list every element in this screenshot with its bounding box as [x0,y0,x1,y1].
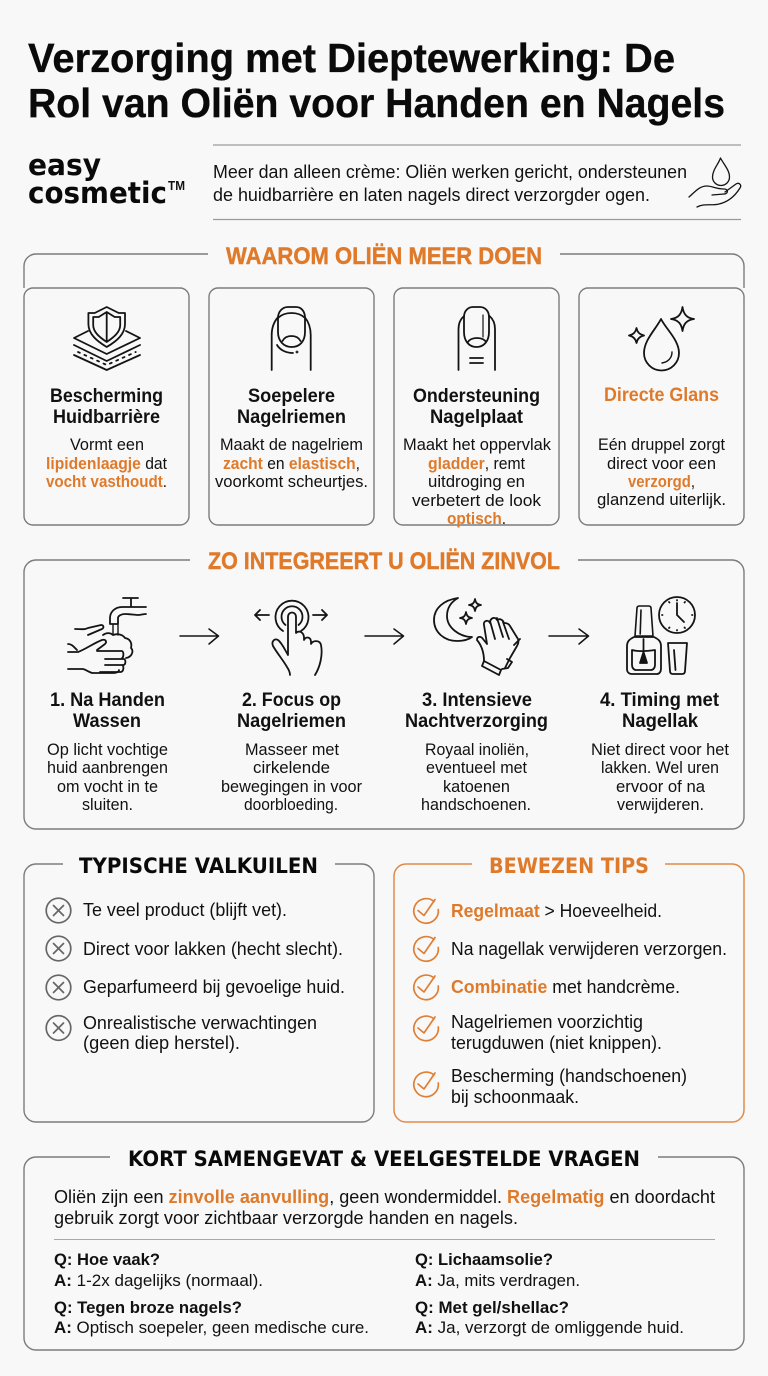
pitfall 4 [46,1013,317,1053]
step 2: focus op nagelriemen: cirkelende [253,759,330,777]
faq: lichaamsolie: Q: Lichaamsolie? [415,1251,553,1269]
heading: waarom: WAAROM OLIËN MEER DOEN [226,243,542,270]
step 3: intensieve nachtverzorging: 3. Intensieve [422,690,532,711]
step 1: na handen wassen [47,598,168,814]
step 1: na handen wassen: huid aanbrengen [47,759,168,777]
title: Rol van Oliën voor Handen en Nagels [28,80,725,126]
step 3: intensieve nachtverzorging: katoenen [443,778,510,796]
step 2: focus op nagelriemen: 2. Focus op [242,690,341,711]
tip 1 [414,899,662,923]
step 3: intensieve nachtverzorging: Royaal inoliën, [425,741,529,759]
arrow 1 [180,629,218,644]
card 3: ondersteuning nagelplaat: Ondersteuning [413,386,540,407]
summary text: Oliën zijn een zinvolle aanvulling, geen wondermiddel. Regelmatig en doordacht [54,1187,715,1207]
faq: lichaamsolie: A: Ja, mits verdragen. [415,1272,580,1290]
card 2: soepelere nagelriemen [209,288,374,525]
step 4: timing met nagellak: verwijderen. [617,796,704,814]
step 3: intensieve nachtverzorging: handschoenen. [421,796,531,814]
card 2: soepelere nagelriemen: Soepelere [248,386,335,407]
step 4: timing met nagellak [591,597,729,814]
panel: kort samengevat en veelgestelde vragen [24,1147,744,1350]
step 2: focus op nagelriemen: doorbloeding. [244,796,338,814]
arrow 3 [549,629,588,644]
card 4: directe glans [579,288,744,525]
heading: zo integreert: ZO INTEGREERT U OLIËN ZINVOL [208,548,560,575]
step 2: focus op nagelriemen: Nagelriemen [237,711,346,732]
panel: zo integreert u oliën zinvol [24,548,744,829]
faq: hoe vaak [54,1251,263,1290]
step 4: timing met nagellak: ervoor of na [616,778,706,796]
card 3: ondersteuning nagelplaat [394,288,559,528]
tip 3 [414,975,680,1000]
logo: easy cosmetic: cosmetic [28,176,167,210]
card 2: soepelere nagelriemen: voorkomt scheurtjes. [215,473,368,491]
step 1: na handen wassen: om vocht in te [57,778,158,796]
logo: easy cosmetic: easy [28,148,101,182]
step 2: focus op nagelriemen: Masseer met [245,741,339,759]
card 1: bescherming huidbarrière: vocht vasthoudt. [46,473,167,491]
card 1: bescherming huidbarrière: Bescherming [50,386,163,407]
summary text [54,1187,715,1228]
card 2: soepelere nagelriemen: zacht en elastisch, [223,455,360,473]
pitfall 1 [46,898,287,923]
tip 5: Bescherming (handschoenen) [451,1066,687,1086]
card 4: directe glans: Directe Glans [604,385,719,406]
step 3: intensieve nachtverzorging: eventueel met [426,759,527,777]
card 4: directe glans: verzorgd, [628,473,695,491]
title [28,35,725,126]
step 4: timing met nagellak: Nagellak [622,711,698,732]
faq: hoe vaak: Q: Hoe vaak? [54,1251,160,1269]
card 2: soepelere nagelriemen: Maakt de nagelriem [220,436,363,454]
card 1: bescherming huidbarrière: Huidbarrière [53,407,160,428]
pitfall 1: Te veel product (blijft vet). [83,900,287,920]
intro text [213,162,687,205]
tip 1: Regelmaat > Hoeveelheid. [451,901,662,921]
faq: tegen broze nagels: Q: Tegen broze nagels? [54,1299,242,1317]
intro text: de huidbarrière en laten nagels direct verzorgder ogen. [213,185,650,205]
faq: tegen broze nagels: A: Optisch soepeler, geen medische cure. [54,1319,369,1337]
faq: tegen broze nagels [54,1299,369,1337]
tip 4 [414,1012,662,1053]
logo: easy cosmetic: TM [168,178,185,193]
step 2: focus op nagelriemen: bewegingen in voor [221,778,362,796]
tip 3: Combinatie met handcrème. [451,977,680,997]
arrow 2 [365,629,404,644]
tip 2: Na nagellak verwijderen verzorgen. [451,939,727,959]
tip 4: terugduwen (niet knippen). [451,1033,662,1053]
panel: bewezen tips [394,854,744,1122]
pitfall 3: Geparfumeerd bij gevoelige huid. [83,977,345,997]
card 3: ondersteuning nagelplaat: optisch. [447,510,506,528]
card 1: bescherming huidbarrière: Vormt een [70,436,144,454]
step 1: na handen wassen: 1. Na Handen [50,690,165,711]
title: Verzorging met Dieptewerking: De [28,35,675,81]
card 3: ondersteuning nagelplaat: Maakt het oppervlak [403,436,552,454]
card 1: bescherming huidbarrière [24,288,189,525]
step 1: na handen wassen: sluiten. [82,796,133,814]
card 1: bescherming huidbarrière: lipidenlaagje dat [46,455,167,473]
faq: lichaamsolie [415,1251,580,1290]
summary text: gebruik zorgt voor zichtbaar verzorgde handen en nagels. [54,1208,518,1228]
step 2: focus op nagelriemen [221,601,362,814]
card 3: ondersteuning nagelplaat: uitdroging en [428,473,525,491]
step 3: intensieve nachtverzorging: Nachtverzorging [405,711,548,732]
tip 5 [414,1066,687,1107]
panel: waarom oliën meer doen [24,243,744,528]
faq: met gel/shellac: A: Ja, verzorgt de omliggende huid. [415,1319,684,1337]
heading: kort samengevat: KORT SAMENGEVAT & VEELGESTELDE VRAGEN [128,1147,640,1172]
pitfall 2: Direct voor lakken (hecht slecht). [83,939,343,959]
faq: met gel/shellac [415,1299,684,1337]
heading: bewezen tips: BEWEZEN TIPS [489,854,649,879]
intro text: Meer dan alleen crème: Oliën werken gericht, ondersteunen [213,162,687,182]
card 4: directe glans: Eén druppel zorgt [598,436,725,454]
step 3: intensieve nachtverzorging [405,598,548,814]
tip 4: Nagelriemen voorzichtig [451,1012,643,1032]
tip 5: bij schoonmaak. [451,1087,579,1107]
logo: easy cosmetic [28,148,185,210]
card 4: directe glans: direct voor een [607,455,716,473]
pitfall 4: (geen diep herstel). [83,1033,240,1053]
panel: typische valkuilen [24,854,374,1122]
heading: typische valkuilen: TYPISCHE VALKUILEN [79,854,318,879]
step 1: na handen wassen: Op licht vochtige [47,741,168,759]
faq: hoe vaak: A: 1-2x dagelijks (normaal). [54,1272,263,1290]
step 4: timing met nagellak: lakken. Wel uren [601,759,719,777]
pitfall 4: Onrealistische verwachtingen [83,1013,317,1033]
faq: met gel/shellac: Q: Met gel/shellac? [415,1299,569,1317]
card 2: soepelere nagelriemen: Nagelriemen [237,407,346,428]
step 1: na handen wassen: Wassen [73,711,141,732]
icon: drop in hand [689,158,741,207]
card 3: ondersteuning nagelplaat: gladder, remt [428,455,525,473]
step 4: timing met nagellak: Niet direct voor het [591,741,729,759]
step 4: timing met nagellak: 4. Timing met [600,690,720,711]
card 3: ondersteuning nagelplaat: verbetert de look [412,492,542,510]
card 3: ondersteuning nagelplaat: Nagelplaat [430,407,524,428]
card 4: directe glans: glanzend uiterlijk. [597,491,726,509]
